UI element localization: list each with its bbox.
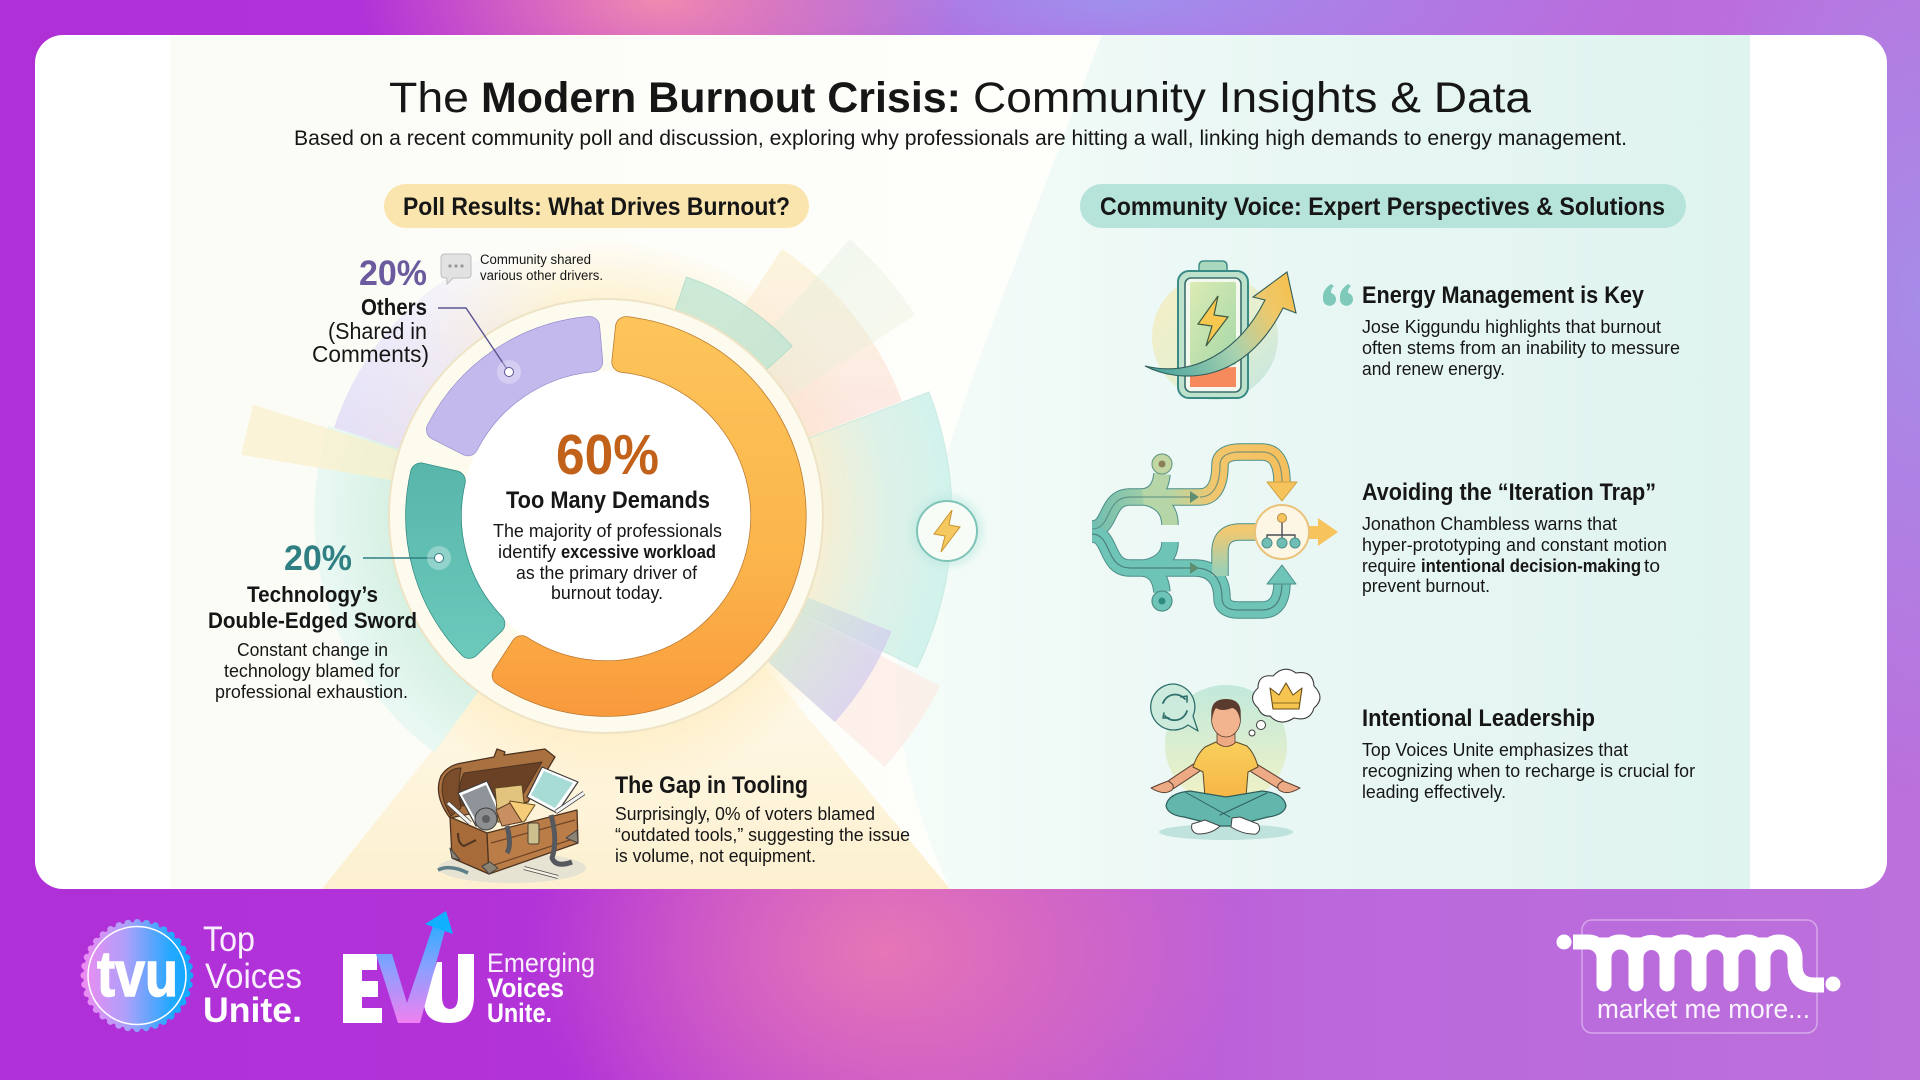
icon: thought cloud with crown <box>1249 669 1320 736</box>
text block: iteration trap <box>1362 479 1667 596</box>
logo: emerging voices unite: Voices <box>487 973 564 1003</box>
text block: iteration trap: require <box>1362 556 1416 576</box>
logo: top voices unite: Top <box>203 920 255 959</box>
logo: market me more <box>1556 920 1840 1033</box>
text block: the gap in tooling: is volume, not equipment. <box>615 846 816 866</box>
callout: technology 20% <box>208 539 451 702</box>
callout: others 20%: various other drivers. <box>480 268 603 283</box>
center text: 60% too many demands: Too Many Demands <box>506 487 710 514</box>
path outlines <box>1092 452 1282 610</box>
callout: technology 20%: technology blamed for <box>224 661 400 681</box>
text block: intentional leadership <box>1362 705 1695 802</box>
text block: the gap in tooling: “outdated tools,” suggesting the issue <box>615 825 910 845</box>
path fills <box>1092 452 1282 610</box>
text block: the gap in tooling <box>615 772 910 866</box>
text block: intentional leadership: Top Voices Unite emphasizes that <box>1362 740 1628 760</box>
white card <box>35 35 1887 889</box>
center text: 60% too many demands: excessive workload <box>561 542 716 562</box>
callout: technology 20%: Technology’s <box>247 582 378 607</box>
donut chart <box>389 299 823 733</box>
heading: community voice: Community Voice: Expert Perspectives & Solutions <box>1100 193 1665 221</box>
text block: the gap in tooling: The Gap in Tooling <box>615 772 808 799</box>
callout: technology 20%: professional exhaustion. <box>215 682 408 702</box>
infographic background <box>170 35 1750 889</box>
heading: community voice <box>1080 184 1686 228</box>
title: Community Insights & Data <box>973 74 1531 122</box>
logo: top voices unite: tvu <box>97 938 178 1010</box>
text block: intentional leadership: leading effectively. <box>1362 782 1506 802</box>
text block: energy management: often stems from an inability to messure <box>1362 338 1680 358</box>
callout: technology 20%: Constant change in <box>237 640 388 660</box>
title <box>389 74 1531 122</box>
text block: the gap in tooling: Surprisingly, 0% of voters blamed <box>615 804 875 824</box>
text block: iteration trap: intentional decision-making <box>1421 556 1641 576</box>
logo: emerging voices unite: Unite. <box>487 998 552 1028</box>
path center lines <box>1092 452 1282 610</box>
text block: iteration trap: Avoiding the “Iteration Trap” <box>1362 479 1656 506</box>
callout: others 20%: Comments) <box>312 341 429 367</box>
heading: poll results: Poll Results: What Drives Burnout? <box>403 193 790 221</box>
icon: branching paths <box>1092 452 1338 611</box>
text block: intentional leadership: recognizing when to recharge is crucial for <box>1362 761 1695 781</box>
callout: technology 20%: 20% <box>284 539 352 578</box>
icon: meditating person <box>1151 669 1320 840</box>
text block: iteration trap: Jonathon Chambless warns that <box>1362 514 1617 534</box>
text block: iteration trap: prevent burnout. <box>1362 576 1490 596</box>
text block: energy management: and renew energy. <box>1362 359 1505 379</box>
title: Modern Burnout Crisis: <box>481 74 961 122</box>
center text: 60% too many demands: burnout today. <box>551 583 663 603</box>
text block: intentional leadership: Intentional Leadership <box>1362 705 1595 732</box>
logo: emerging voices unite <box>343 911 595 1028</box>
icon: lightning badge <box>911 495 983 567</box>
text block: energy management: Jose Kiggundu highlights that burnout <box>1362 317 1661 337</box>
center text: 60% too many demands: 60% <box>556 423 659 487</box>
center text: 60% too many demands: as the primary driver of <box>516 563 698 583</box>
segment: too many demands 60% <box>502 327 796 706</box>
center text: 60% too many demands: The majority of professionals <box>493 521 722 541</box>
text block: iteration trap: to <box>1644 556 1660 576</box>
text block: energy management <box>1362 282 1680 379</box>
center text: 60% too many demands: identify <box>498 542 556 562</box>
subtitle: Based on a recent community poll and discussion, exploring why professionals are hitting a wall, linking high demands to energy management. <box>294 127 1627 150</box>
logo: market me more: market me more... <box>1597 994 1810 1024</box>
callout: others 20% <box>312 252 603 384</box>
heading: poll results <box>384 184 809 228</box>
quote mark <box>1323 284 1353 306</box>
callout: others 20%: Community shared <box>480 252 591 267</box>
callout: technology 20%: Double-Edged Sword <box>208 608 417 633</box>
callout: others 20%: (Shared in <box>328 318 427 344</box>
logo: top voices unite: Unite. <box>203 991 302 1030</box>
center text: 60% too many demands <box>493 423 722 603</box>
callout: others 20%: 20% <box>359 254 427 293</box>
icon: tool chest <box>438 749 586 883</box>
segment: technology 20% <box>416 473 494 648</box>
tablet: teal <box>527 767 578 813</box>
text block: energy management: Energy Management is Key <box>1362 282 1645 309</box>
text block: iteration trap: hyper-prototyping and constant motion <box>1362 535 1667 555</box>
icon: speech bubble with refresh <box>1151 684 1198 731</box>
title: The <box>389 74 469 122</box>
callout: others 20%: Others <box>361 294 427 320</box>
tablet: grey <box>458 781 503 826</box>
logo: emerging voices unite: Emerging <box>487 948 595 978</box>
icon: speech bubble <box>441 254 471 284</box>
logo: top voices unite: Voices <box>205 957 302 996</box>
segment: others 20% <box>437 327 592 446</box>
logo: top voices unite <box>84 920 302 1030</box>
icon: battery with rising arrow <box>1145 261 1296 400</box>
